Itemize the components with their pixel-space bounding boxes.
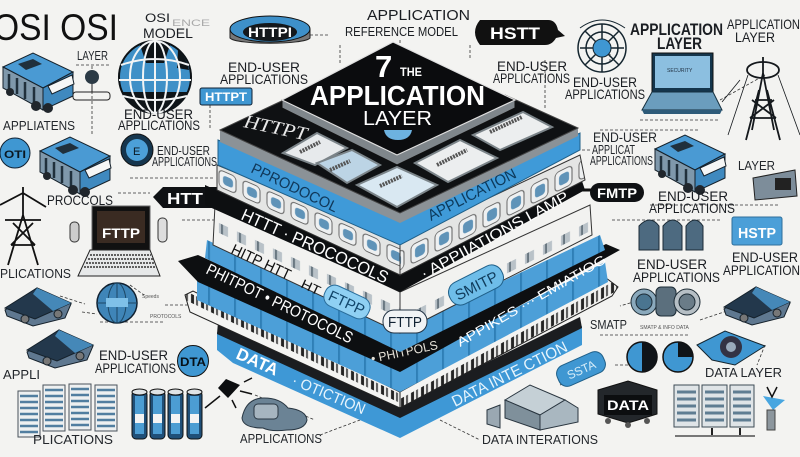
icon: tower right [722,57,800,140]
layer 4: black protocols band: APPIKES ··· EMIATIOG [454,252,609,350]
icon: eye device [697,331,765,365]
pill: FTPP [321,282,373,322]
layer stack [178,42,620,438]
label: appli: APPLI [3,368,40,382]
label: end-user applications, below wheel: APPLICATIONS [565,86,645,102]
pill: FTPP: FTPP [326,288,367,319]
layer 7: black http band [205,175,585,292]
small captions near globe: Speeds [142,294,159,300]
label: end-user applications mid right: APPLICATIONS [633,269,720,285]
layer 7: black http band: · APPIIATIONS LAMP [418,188,572,283]
label: plications: PLICATIONS [0,267,71,281]
tag: HTT pointer: HTT [167,191,203,208]
icon: router left 2 [27,330,93,368]
icon: laptop left: FTTP [102,225,140,241]
label: end-user applications, top centre-left: APPLICATIONS [220,71,308,87]
pill: FTTP: FTTP [388,314,422,331]
tag: HSTP: HSTP [738,225,776,242]
layer 4: black protocols band: PHITPOT • PROTOCOLS [203,261,355,347]
tag: HTT pointer [153,187,240,208]
label: end-user applications, below wheel: END-USER [573,74,637,90]
icon: server cabinets right [674,385,755,436]
label: end-user applications bottom left: END-USER [99,347,168,363]
card 5 [473,112,552,150]
pill: SMITP: SMITP [452,268,501,304]
heading: application layer light: LAYER [735,29,775,45]
heading: 7 the application layer: LAYER [363,108,432,130]
layer 9: blue protocol band: PPRODOCOL [248,160,340,216]
icon: router left 1 [5,288,71,326]
icon: layer device [753,170,797,200]
layer 1: data interaction band: · OTICTION [289,372,368,418]
decorative connectors [60,35,780,440]
icon: small node [73,70,110,100]
layer 6: white protocols band [213,205,592,333]
badge: DTA [178,346,208,376]
card 2 [317,150,380,183]
label: appliatens: APPLIATENS [3,119,75,133]
server racks [18,384,117,437]
heading: application reference model: REFERENCE MODEL [345,24,458,39]
icon: data boxes [487,385,578,430]
label: proccols: PROCCOLS [47,192,113,208]
label: end-user applications, top centre-left: END-USER [228,59,300,75]
icon: tower left [0,187,46,265]
pill: SSTA [554,349,608,389]
layer 1: data interaction band [217,317,582,438]
label: end-user applications under truck 3: APPLICATIONS [649,200,735,216]
icon: truck 3 [655,135,726,195]
layer 6: white protocols band: HT [299,276,323,298]
heading: OSI model: OSI [145,11,170,25]
icon: router right [724,287,790,325]
label: data interations: DATA INTERATIONS [482,433,598,447]
layer 10: black platform with cards: HTTPT [241,111,310,146]
pill: FTTP [383,310,427,333]
layer 9: blue protocol band: APPLICATION [425,165,519,225]
card 3 [357,167,437,207]
heading: 7 the application layer: APPLICATION [310,80,485,111]
icon: truck 1 [3,53,74,113]
faded label: ENCE [172,18,210,28]
layer 1: data interaction band: DATA [233,344,281,380]
label: end-user applications under truck 3: END-USER [658,188,728,204]
label: end-user applications, right of stack: APPLICAT [592,143,635,157]
heading: OSI model: MODEL [143,25,193,41]
icon: three discs [631,287,700,316]
label: SMATP: SMATP [590,318,627,332]
label: end-user applications, left middle: END-USER [157,144,210,158]
heading: 7 the application layer: 7 [375,49,392,84]
icon: HTTP disk [230,16,310,43]
layer 4: black protocols band [178,244,620,372]
icon: beacon [763,387,785,430]
label: end-user applications, left top: END-USER [124,106,193,122]
label: end-user applications, right of stack: APPLICATIONS [590,154,653,168]
label: data layer: DATA LAYER [705,366,782,380]
tag: FMTP: FMTP [597,185,637,201]
icon: storage cylinders [639,220,703,250]
layer 4: black protocols band: • PHITPOLS [370,338,439,366]
tag: HTTPT [200,88,252,105]
layer 10: black platform with cards [220,95,578,223]
icon: laptop right: SECURITY [667,68,693,74]
badge: E [121,134,153,166]
small caption: PROTOCOLS [150,314,182,320]
label: end-user applications, left middle: APPLICATIONS [152,155,217,169]
layer 9: blue protocol band [218,133,580,245]
layer 11: top diamond title plate [282,42,515,165]
label: end-user applications, right of stack: END-USER [593,129,657,145]
icon: laptop right [642,53,722,114]
card 4 [415,140,497,182]
pill: SSTA: SSTA [565,357,598,382]
layer 6: white protocols band: HITP HTT [228,241,293,284]
label: end-user applications bottom left: APPLICATIONS [95,360,176,376]
heading: 7 the application layer: THE [400,65,422,79]
tag: HTTPT: HTTPT [205,90,248,104]
label: layer: LAYER [77,49,108,63]
icon: HTTP disk: HTTPI [248,24,292,40]
icon: truck 2 [40,137,111,197]
tag: FMTP [570,183,644,202]
badge: OTI [0,138,30,168]
card 1 [283,133,347,165]
label: layer right: LAYER [738,159,775,173]
layer 8: icon strip [217,155,585,275]
label: end-user applications, top centre-right: END-USER [497,58,567,74]
pill: SMITP [445,261,507,309]
label: applications bottom: APPLICATIONS [240,432,322,446]
heading: application layer bold: LAYER [657,34,702,53]
storage cylinders [132,389,202,439]
badge: DTA: DTA [180,355,206,369]
badges: two blue circles [627,342,693,372]
icon: small globe [97,283,137,323]
label: end-user applications mid right: END-USER [637,256,707,272]
heading: application layer bold: APPLICATION [630,20,723,39]
icon: data badge: DATA [607,398,649,413]
icon: globe [119,41,191,114]
label: end-user applications, top centre-right: APPLICATIONS [493,70,570,86]
layer 3: blue band [197,262,608,392]
layer 1: data interaction band: DATA INTE CTION [449,339,570,411]
tag: HSTP [732,217,782,245]
layer 7: black http band: HTTT · PROCOCOLS [238,205,391,287]
label: plications bottom: PLICATIONS [33,433,113,447]
badge: OTI: OTI [4,149,26,161]
icon: device bundle [242,398,307,431]
tag: HSTT [475,20,565,45]
layer 2: barcode band [185,278,618,408]
icon: burst arrow [205,378,252,408]
label: end-user applications, left top: APPLICATIONS [118,117,200,133]
small caption: SMATP & INFO DATA [640,325,689,331]
tag: HSTT: HSTT [490,24,541,43]
icon: data badge [598,381,657,428]
icon: laptop left [70,206,167,276]
icon: network wheel [578,20,626,72]
layer 5: blue band [205,235,605,352]
heading: application reference model: APPLICATION [367,8,470,24]
badge: E: E [133,146,140,158]
